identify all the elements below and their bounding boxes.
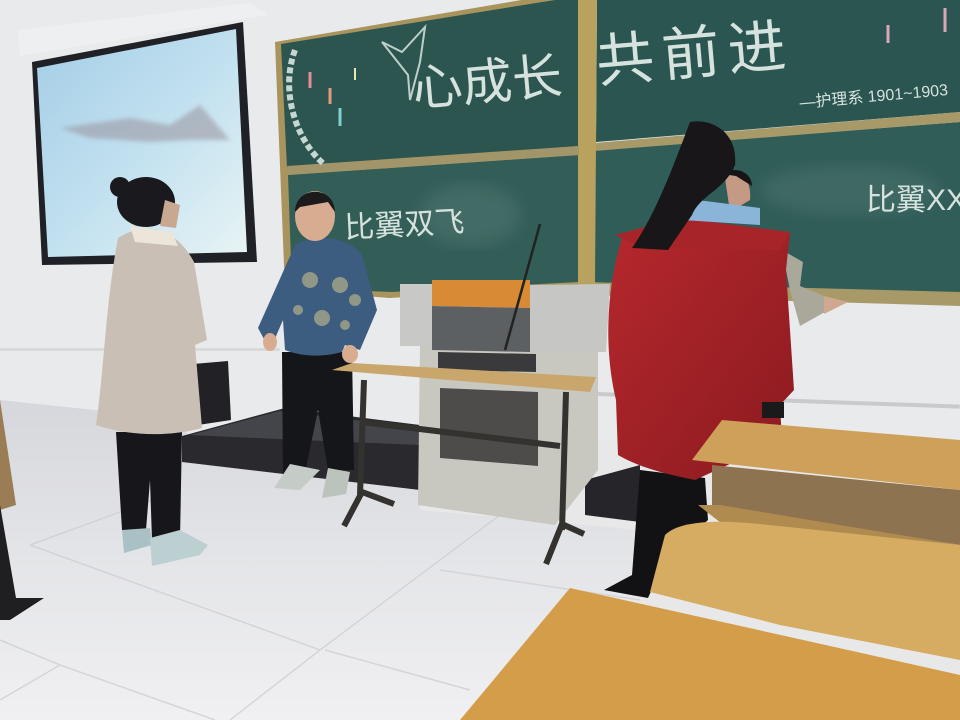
front wooden table	[332, 363, 596, 564]
left furniture edge	[0, 400, 16, 510]
man in blue sweater	[258, 191, 377, 498]
wall	[0, 0, 960, 440]
chalkboards	[275, 0, 960, 306]
front desk top	[460, 588, 960, 720]
chalk text: 心成长	[410, 48, 564, 117]
stage platform	[182, 408, 640, 522]
floor	[0, 400, 640, 720]
chalk text	[289, 8, 960, 245]
woman in beige coat	[96, 177, 208, 566]
chalk text: —护理系 1901~1903	[799, 81, 949, 112]
wooden chair back	[650, 522, 960, 660]
lectern	[400, 224, 610, 525]
chalk text: 比翼双飞	[344, 206, 465, 245]
right desk	[692, 420, 960, 560]
woman in red coat	[604, 121, 848, 598]
black bag	[193, 361, 231, 425]
chalk text: 共前进	[593, 13, 796, 95]
projector screen	[18, 3, 268, 265]
